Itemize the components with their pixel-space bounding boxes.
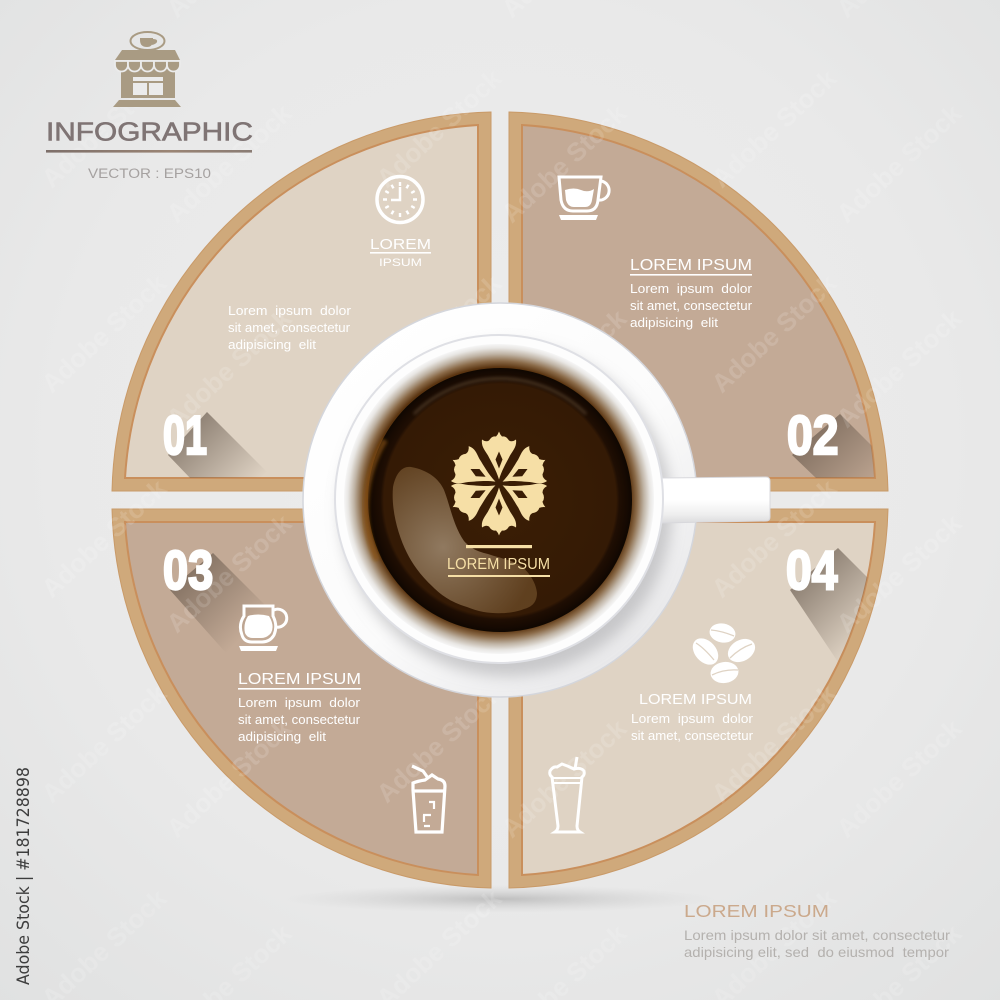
stock credit: Adobe Stock | #181728898	[14, 767, 33, 985]
heading 04: LOREM IPSUM	[639, 691, 752, 708]
number shadow 04	[790, 548, 868, 656]
text block 04: sit amet, consectetur	[631, 728, 754, 743]
title rule	[46, 150, 252, 153]
text block 01: adipisicing elit	[228, 337, 316, 352]
text block 03: Lorem ipsum dolor	[238, 695, 361, 710]
panel 02	[509, 112, 905, 491]
text block 01	[228, 303, 352, 352]
icon: coffee cup	[559, 177, 609, 220]
text block 02: adipisicing elit	[630, 315, 718, 330]
panel 01	[112, 112, 491, 491]
heading 02: LOREM IPSUM	[630, 257, 752, 274]
cup interior	[344, 344, 654, 654]
footer text: Lorem ipsum dolor sit amet, consectetur	[684, 927, 950, 943]
number 04: 04	[786, 539, 837, 601]
heading 01: IPSUM	[379, 257, 422, 269]
number shadow 02	[792, 414, 875, 478]
heading 01: LOREM	[370, 236, 431, 253]
number 03: 03	[163, 539, 213, 601]
subtitle: VECTOR : EPS10	[88, 166, 211, 181]
footer heading: LOREM IPSUM	[684, 901, 829, 921]
icon: tall glass	[550, 757, 584, 832]
cup label: LOREM IPSUM	[447, 556, 550, 573]
text block 03: adipisicing elit	[238, 729, 326, 744]
icon: coffee beans	[688, 621, 759, 685]
text block 01: sit amet, consectetur	[228, 320, 351, 335]
coffee surface	[368, 368, 632, 632]
icon: clock	[377, 176, 423, 222]
number 01: 01	[163, 406, 207, 467]
text block 03	[238, 695, 361, 744]
ground shadow	[285, 885, 715, 913]
cup rim	[335, 335, 663, 663]
panel 03	[112, 509, 491, 888]
coffee reflection	[393, 467, 537, 613]
text block 04	[631, 711, 754, 743]
cup handle	[660, 477, 770, 523]
footer text: adipisicing elit, sed do eiusmod tempor	[684, 944, 949, 960]
text block 02: Lorem ipsum dolor	[630, 281, 753, 296]
icon: glass mug	[239, 606, 287, 651]
number 02: 02	[787, 404, 838, 466]
coffee highlight arc	[414, 379, 586, 414]
number shadow 01	[168, 412, 260, 478]
coffee cup illustration	[303, 303, 770, 697]
heading 03: LOREM IPSUM	[238, 671, 361, 688]
number shadow 03	[170, 553, 262, 644]
logo: store icon	[113, 32, 181, 107]
text block 04: Lorem ipsum dolor	[631, 711, 754, 726]
heading 01	[370, 236, 431, 269]
saucer shadow	[340, 344, 672, 676]
cup label	[447, 545, 550, 577]
panel 04	[509, 509, 910, 888]
text block 02	[630, 281, 753, 330]
saucer	[303, 303, 697, 697]
icon: flower emblem	[444, 432, 554, 536]
text block 03: sit amet, consectetur	[238, 712, 361, 727]
text block 01: Lorem ipsum dolor	[228, 303, 352, 318]
text block 02: sit amet, consectetur	[630, 298, 753, 313]
icon: iced drink	[412, 766, 445, 832]
footer text	[684, 927, 950, 960]
title: INFOGRAPHIC	[46, 116, 253, 146]
